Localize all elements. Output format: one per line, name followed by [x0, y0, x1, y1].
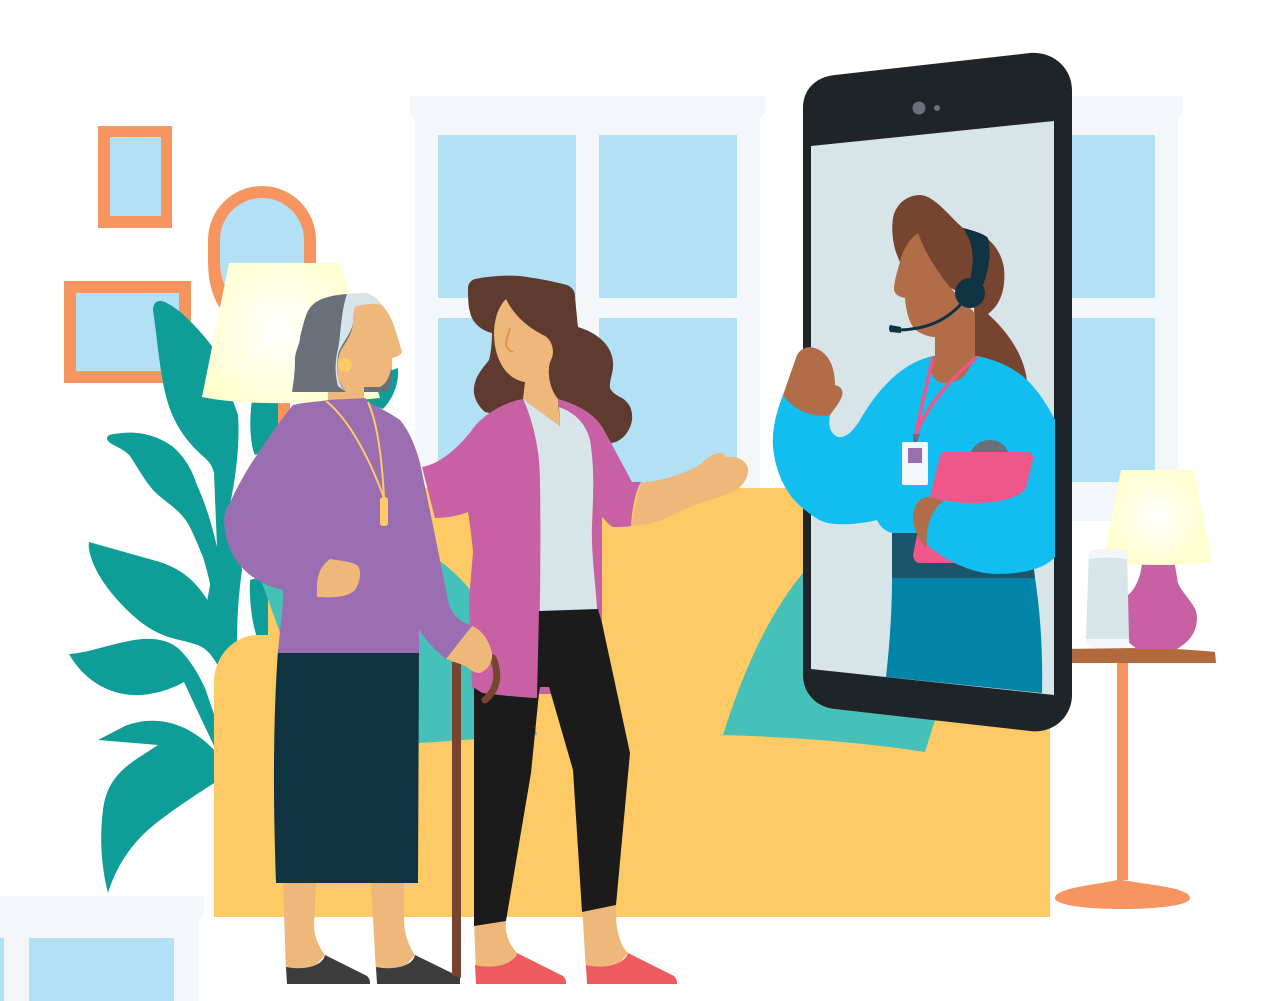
vase: [1086, 549, 1129, 648]
main window: [410, 96, 765, 508]
face and neck: [494, 299, 560, 426]
sofa: [214, 488, 1050, 917]
clipboard: [930, 440, 1033, 503]
elderly woman: [224, 293, 497, 984]
cushion: left: [262, 549, 537, 743]
shoe left: [475, 953, 566, 984]
nurse top: [773, 356, 1055, 574]
smartphone: [803, 53, 1072, 731]
side table: [1055, 470, 1216, 909]
bottom-left window: [0, 896, 204, 1001]
earring: [338, 358, 352, 372]
cushion: right: [723, 560, 960, 752]
shoe right: [586, 953, 677, 984]
nurse trousers: [892, 533, 1035, 578]
floor lamp: [202, 263, 380, 445]
skirt: [274, 650, 419, 883]
nose line: [506, 328, 513, 352]
hair: [468, 276, 632, 443]
necklace: [326, 401, 388, 526]
shoes: [286, 955, 370, 984]
arched mirror: [208, 186, 316, 320]
trousers: [474, 609, 630, 926]
nurse on phone screen: [773, 195, 1055, 693]
legs: [283, 883, 415, 972]
nurse hair: [892, 195, 1027, 381]
table lamp: [1103, 470, 1212, 649]
shirt: [523, 399, 598, 612]
lanyard: [916, 357, 977, 434]
nurse hand raised: [783, 347, 843, 416]
id badge: [902, 442, 928, 485]
nurse face and neck: [894, 233, 975, 360]
cane: [452, 658, 497, 978]
clipboard lower: [913, 535, 955, 563]
picture frame: wide: [64, 281, 191, 383]
hair: [292, 293, 382, 392]
nurse hand on clipboard: [913, 497, 944, 546]
cardigan: [422, 399, 641, 698]
hand on cane: [446, 626, 492, 673]
nurse neck skin: [930, 356, 977, 383]
hand extended: [631, 453, 748, 526]
cardigan: [224, 398, 472, 659]
younger woman: [422, 276, 748, 984]
right window: [1060, 96, 1183, 521]
plant: [69, 301, 398, 893]
legs: [474, 900, 628, 972]
face and neck: [328, 304, 402, 400]
picture frame: tall: [98, 126, 172, 228]
headset: [889, 228, 990, 333]
hand on chest: [317, 559, 360, 597]
